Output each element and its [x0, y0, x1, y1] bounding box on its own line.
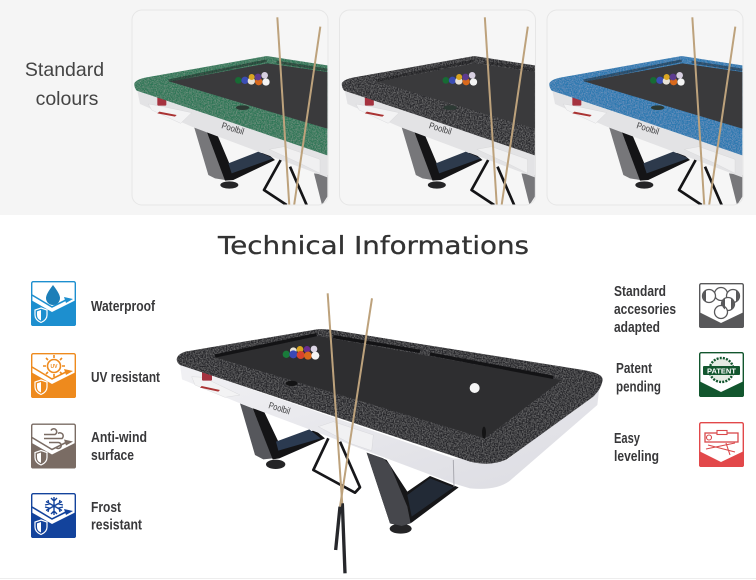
panel: standard colours background — [0, 0, 756, 215]
triangle rack — [313, 438, 360, 493]
icon: patent seal: PATENT — [707, 366, 736, 376]
logo: Poolbil — [267, 400, 291, 416]
feature: patent pending — [616, 353, 744, 397]
feature: patent pending: Patent — [616, 361, 652, 377]
feature: patent pending: pending — [616, 380, 661, 396]
right leg — [367, 453, 459, 534]
left leg — [240, 403, 325, 469]
card: blue table — [547, 10, 743, 206]
card: black table — [340, 10, 536, 206]
rack of balls — [283, 346, 319, 360]
bottom rule — [0, 578, 756, 579]
icon: spirit level — [699, 423, 744, 467]
feature: anti-wind surface: Anti-wind — [91, 430, 147, 446]
icon: sun: UV — [51, 364, 58, 370]
feature: easy leveling: leveling — [614, 449, 659, 465]
icon: billiard balls — [699, 284, 744, 328]
feature: uv resistant: UV resistant — [91, 370, 160, 386]
icon: water drop — [31, 282, 76, 326]
heading: standard colours: Standard — [25, 59, 104, 81]
card: green table — [132, 10, 328, 206]
apron seam — [452, 460, 455, 487]
feature: easy leveling — [614, 423, 744, 467]
feature: anti-wind surface — [31, 424, 147, 468]
feature: anti-wind surface: surface — [91, 448, 134, 464]
title: Technical Informations — [217, 231, 529, 260]
feature: frost resistant — [31, 494, 142, 538]
table apron — [180, 365, 599, 489]
pockets — [286, 381, 486, 439]
card: black table: Poolbil — [428, 120, 453, 137]
icon: wind — [31, 424, 76, 468]
feature: uv resistant — [31, 354, 160, 398]
cue holder — [318, 422, 373, 451]
feature: standard accessories adapted — [614, 284, 744, 336]
feature: frost resistant: Frost — [91, 500, 121, 516]
table rail — [177, 329, 603, 464]
playing surface — [215, 336, 562, 438]
feature: easy leveling: Easy — [614, 431, 640, 447]
heading: standard colours: colours — [36, 88, 99, 110]
feature: standard accessories adapted: Standard — [614, 284, 666, 300]
feature: standard accessories adapted: accesories — [614, 302, 676, 318]
main pool table illustration — [177, 293, 603, 573]
heading: standard colours — [25, 59, 104, 110]
feature: frost resistant: resistant — [91, 518, 142, 534]
card: green table: Poolbil — [220, 120, 245, 137]
feature: waterproof: Waterproof — [91, 299, 155, 315]
accessory tray — [192, 369, 240, 397]
cue sticks — [328, 293, 372, 573]
feature: standard accessories adapted: adapted — [614, 320, 660, 336]
cushions — [215, 335, 553, 377]
feature: waterproof — [31, 282, 155, 326]
card: blue table: Poolbil — [635, 120, 660, 137]
cue ball — [470, 383, 480, 393]
icon: snowflake — [31, 494, 76, 538]
